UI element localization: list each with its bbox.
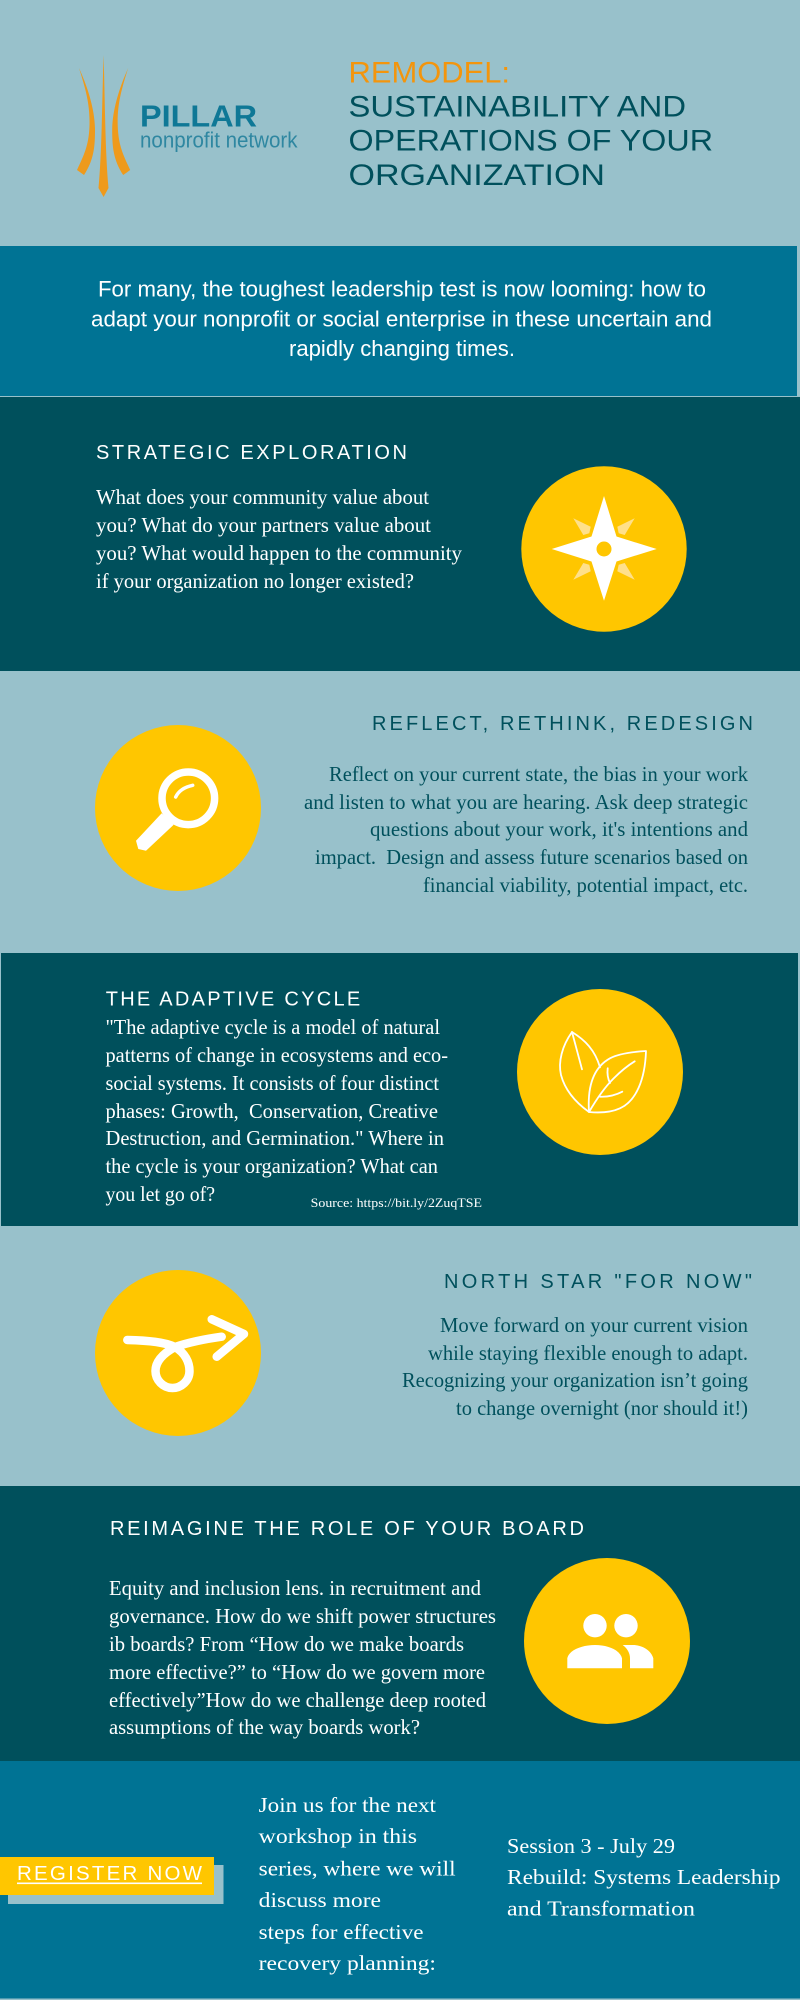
body text: ib boards? From “How do we make boards (109, 1632, 464, 1656)
body text: Move forward on your current vision (440, 1313, 748, 1337)
title (348, 57, 713, 192)
body text: What does your community value about (96, 485, 429, 509)
text: next workshop: recovery planning: (259, 1951, 436, 1975)
heading: REIMAGINE THE ROLE OF YOUR BOARD (110, 1518, 584, 1540)
body text: "The adaptive cycle is a model of natural (106, 1015, 440, 1039)
panel: the adaptive cycle (1, 953, 798, 1226)
text: session details: Rebuild: Systems Leadership (507, 1865, 781, 1889)
body text: you let go of? (106, 1182, 215, 1206)
body text: financial viability, potential impact, etc. (423, 873, 748, 897)
body text: you? What do your partners value about (96, 513, 431, 537)
body text: Destruction, and Germination." Where in (106, 1126, 444, 1150)
text: next workshop: workshop in this (259, 1824, 417, 1848)
body text: the cycle is your organization? What can (106, 1154, 438, 1178)
body text (109, 1576, 496, 1739)
text: next workshop (259, 1793, 456, 1975)
text: next workshop: steps for effective (259, 1920, 424, 1944)
icon: two people (524, 1558, 690, 1724)
body text (304, 762, 748, 897)
title: ORGANIZATION (348, 159, 605, 192)
body text: questions about your work, it's intentions and (370, 817, 748, 841)
icon: leaves (517, 989, 683, 1155)
icon: compass star (521, 466, 687, 632)
body text: more effective?” to “How do we govern more (109, 1660, 485, 1684)
logo wordmark: PILLAR (140, 99, 257, 134)
heading: THE ADAPTIVE CYCLE (106, 989, 360, 1011)
heading: NORTH STAR "FOR NOW" (444, 1271, 752, 1293)
body text: to change overnight (nor should it!) (456, 1396, 748, 1420)
body text: impact. Design and assess future scenarios based on (315, 845, 748, 869)
button: register now: REGISTER NOW (17, 1862, 203, 1885)
heading: REFLECT, RETHINK, REDESIGN (372, 713, 753, 735)
panel: reimagine the role of your board (0, 1486, 800, 1761)
icon: three orange pillars (77, 55, 130, 197)
body text: phases: Growth, Conservation, Creative (106, 1099, 438, 1123)
intro text: rapidly changing times. (289, 336, 515, 361)
body text: Reflect on your current state, the bias in your work (329, 762, 748, 786)
body text: Equity and inclusion lens. in recruitment and (109, 1576, 481, 1600)
button: register now (0, 1857, 224, 1904)
body text: effectively”How do we challenge deep rooted (109, 1688, 486, 1712)
panel: header (0, 0, 800, 246)
panel: strategic exploration (0, 397, 800, 671)
body text: assumptions of the way boards work? (109, 1715, 420, 1739)
body text (106, 1015, 448, 1206)
body text: and listen to what you are hearing. Ask deep strategic (304, 790, 748, 814)
heading: STRATEGIC EXPLORATION (96, 442, 407, 464)
text: next workshop: Join us for the next (259, 1793, 436, 1817)
body text: if your organization no longer existed? (96, 569, 414, 593)
logo tagline: nonprofit network (140, 128, 298, 153)
panel: call to action (0, 1761, 800, 1998)
text: session details: Session 3 - July 29 (507, 1834, 675, 1858)
body text: Recognizing your organization isn’t going (402, 1368, 748, 1392)
text: session details: and Transformation (507, 1897, 695, 1921)
intro text: For many, the toughest leadership test is now looming: how to (98, 277, 706, 302)
logo: Pillar Nonprofit Network (77, 55, 298, 197)
title: SUSTAINABILITY AND (348, 91, 686, 124)
source note: Source: https://bit.ly/2ZuqTSE (311, 1195, 482, 1210)
body text: social systems. It consists of four distinct (106, 1071, 439, 1095)
text: next workshop: series, where we will (259, 1857, 456, 1881)
text: session details (507, 1834, 781, 1921)
body text (96, 485, 462, 593)
icon: magnifying glass (95, 725, 261, 891)
body text: governance. How do we shift power structures (109, 1604, 496, 1628)
title: OPERATIONS OF YOUR (348, 125, 713, 158)
icon: looping arrow (95, 1270, 261, 1436)
body text: you? What would happen to the community (96, 541, 462, 565)
panel: intro (0, 246, 797, 396)
intro text (91, 277, 712, 361)
panel: reflect, rethink, redesign (0, 671, 800, 953)
panel: north star for now (0, 1226, 800, 1486)
body text (402, 1313, 748, 1420)
body text: patterns of change in ecosystems and eco- (106, 1043, 448, 1067)
body text: while staying flexible enough to adapt. (428, 1341, 748, 1365)
text: next workshop: discuss more (259, 1888, 381, 1912)
intro text: adapt your nonprofit or social enterprise in these uncertain and (91, 307, 712, 332)
title: REMODEL: (348, 57, 510, 90)
